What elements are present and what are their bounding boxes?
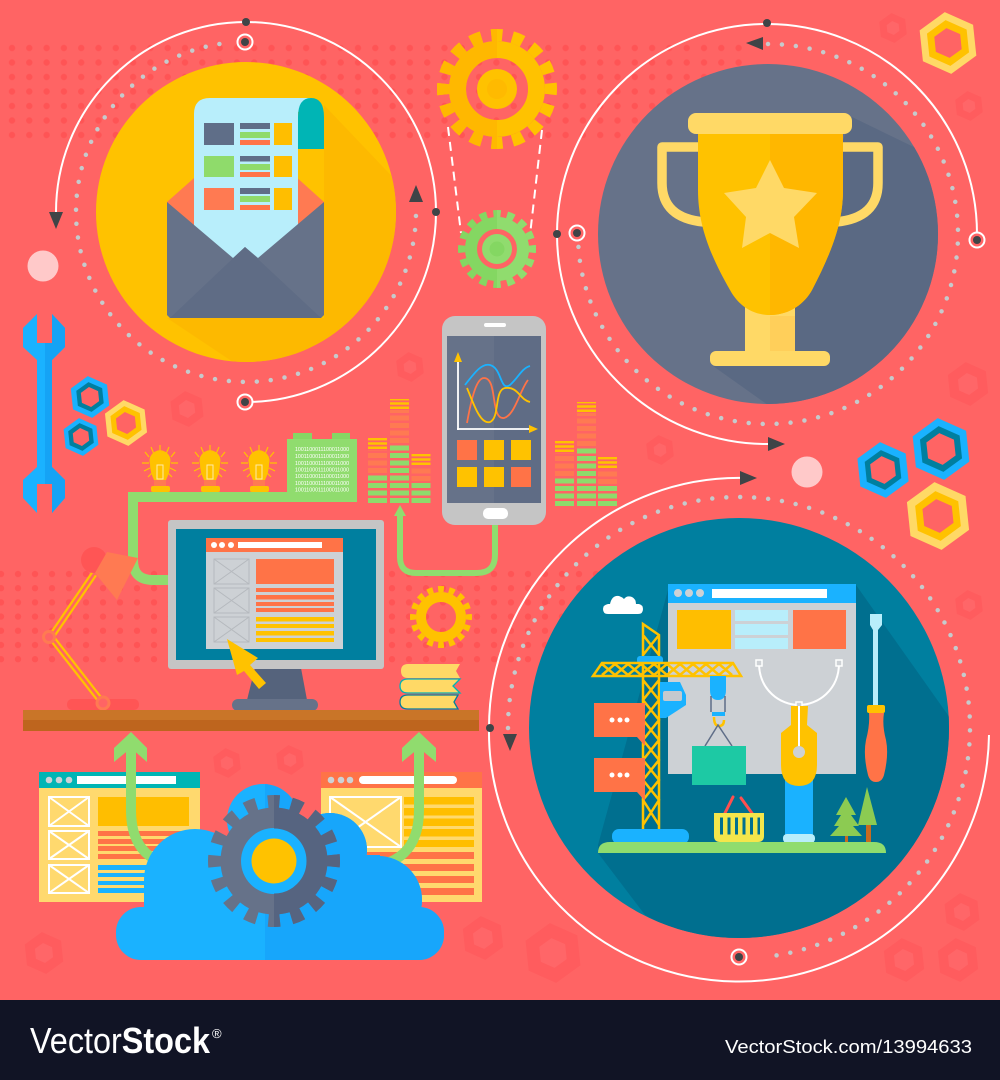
cloud bbox=[116, 784, 444, 960]
crane bbox=[593, 624, 741, 844]
footer url: VectorStock.com/13994633 bbox=[725, 1036, 972, 1057]
pale dots bbox=[28, 250, 822, 488]
binary data block: 1001100011100011000 bbox=[295, 461, 349, 467]
binary data block: 1001100011100011000 bbox=[295, 468, 349, 474]
desk shelf bbox=[23, 710, 479, 731]
trophy cup bbox=[688, 113, 852, 366]
green wiring bbox=[133, 497, 292, 580]
crane hook and load bbox=[692, 676, 746, 785]
trees bbox=[830, 787, 877, 843]
ring: construction circuit bbox=[486, 471, 989, 982]
icon: wrench bbox=[23, 314, 65, 513]
arrow: phone to equalizer bbox=[394, 505, 495, 573]
phone chart bbox=[454, 352, 538, 433]
basket bbox=[714, 797, 764, 842]
small cloud bbox=[603, 596, 643, 614]
gear: small yellow bbox=[413, 589, 469, 645]
bezier curve bbox=[756, 660, 842, 708]
envelope front bbox=[167, 202, 324, 318]
books bbox=[400, 664, 460, 709]
dashed gear belt bbox=[448, 127, 542, 235]
binary data block bbox=[287, 433, 357, 502]
panel: trophy circle bbox=[598, 64, 938, 404]
smartphone bbox=[442, 316, 546, 525]
speech bubbles bbox=[594, 703, 645, 801]
ring: email circuit bbox=[49, 18, 440, 410]
paper document bbox=[194, 98, 324, 300]
trophy handles bbox=[662, 147, 878, 222]
left web window bbox=[39, 772, 200, 902]
binary data block: 1001100011100011000 bbox=[295, 447, 349, 453]
browser window bbox=[668, 584, 856, 774]
dot pattern areas bbox=[0, 40, 747, 665]
arrows: cloud to windows bbox=[114, 732, 436, 867]
footer logo: VectorStock bbox=[30, 1020, 211, 1061]
cloud gear bbox=[214, 802, 334, 920]
icon: light bulbs bbox=[142, 445, 277, 492]
binary data block: 1001100011100011000 bbox=[295, 474, 349, 480]
envelope back flap bbox=[167, 132, 324, 260]
equalizer right bbox=[564, 402, 608, 506]
web page wireframe bbox=[206, 538, 343, 649]
desktop monitor bbox=[168, 520, 384, 711]
panel: construction circle bbox=[529, 518, 960, 945]
binary data block: 1001100011100011000 bbox=[295, 454, 349, 460]
right web window bbox=[321, 772, 482, 902]
phone tiles bbox=[457, 440, 531, 487]
screwdriver bbox=[865, 614, 887, 782]
gear: green bbox=[462, 214, 532, 284]
icon: hex nuts right bbox=[857, 12, 976, 550]
cursor bbox=[227, 639, 266, 689]
ring: trophy circuit bbox=[553, 19, 984, 451]
binary data block: 1001100011100011000 bbox=[295, 481, 349, 487]
footer bar bbox=[0, 1000, 1000, 1080]
trophy star bbox=[724, 160, 817, 248]
desk lamp bbox=[44, 547, 139, 710]
icon: hex nuts left bbox=[64, 376, 147, 456]
gear: large yellow bbox=[443, 35, 551, 143]
equalizer left bbox=[378, 399, 421, 503]
panel: email circle bbox=[96, 62, 405, 370]
binary data block: 1001100011100011000 bbox=[295, 488, 349, 494]
ground bbox=[598, 842, 886, 853]
footer registered mark: ® bbox=[212, 1026, 222, 1041]
pen tool bbox=[781, 706, 817, 843]
